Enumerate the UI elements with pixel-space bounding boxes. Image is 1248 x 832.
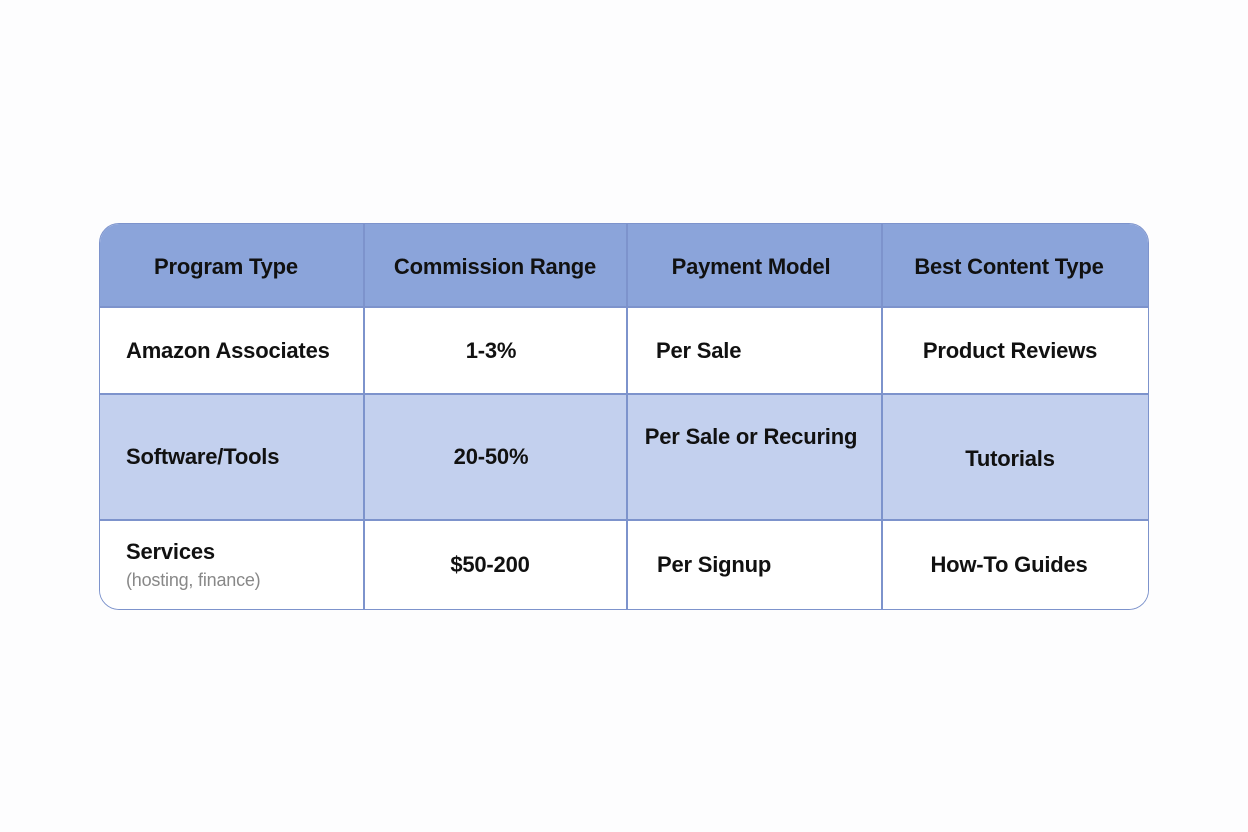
row: Software/Tools: Software/Tools [126,444,279,469]
table [99,223,1149,610]
row: Services [100,520,1148,609]
row: Services: (hosting, finance) [126,570,260,590]
row: Amazon Associates [100,307,1148,394]
header row: Best Content Type [914,254,1104,279]
header row: Program Type [154,254,298,279]
row: Software/Tools: Tutorials [965,446,1055,471]
row: Software/Tools [100,394,1148,520]
row: Amazon Associates: Product Reviews [923,338,1097,362]
row: Software/Tools: Per Sale or Recuring [645,424,857,449]
row: Software/Tools: 20-50% [454,444,528,469]
row: Amazon Associates: Amazon Associates [126,338,330,362]
header row: Payment Model [672,254,830,279]
row: Services: $50-200 [450,552,530,576]
row: Services: Per Signup [657,552,771,576]
header row [100,224,1148,310]
row: Amazon Associates: 1-3% [466,338,516,362]
row: Services: How-To Guides [930,552,1088,576]
header row: Commission Range [394,254,596,279]
row: Services: Services [126,538,215,564]
row: Amazon Associates: Per Sale [656,338,741,362]
